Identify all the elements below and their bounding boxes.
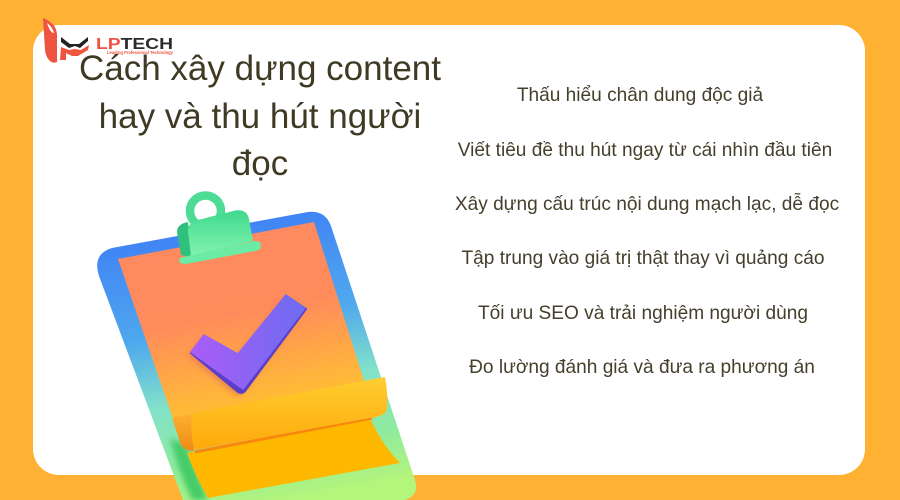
paper [118,222,364,445]
clip ring [190,196,221,226]
title [79,49,441,183]
logo: LPTECH [43,18,174,63]
title: Cách xây dựng content [79,49,441,88]
fold cast shadow [195,418,372,452]
check mark [188,299,303,396]
paper bottom [187,418,400,498]
list item 3: Xây dựng cấu trúc nội dung mạch lạc, dễ đọc [455,194,839,215]
logo: LPTECH: Leading Professional Technology [107,50,174,55]
clip bar [179,241,261,264]
board [97,212,416,500]
list item 2: Viết tiêu đề thu hút ngay từ cái nhìn đầu tiên [458,140,832,161]
board shadow [170,438,208,500]
list item 4: Tập trung vào giá trị thật thay vì quảng cáo [461,248,824,269]
list item 5: Tối ưu SEO và trải nghiệm người dùng [478,303,808,324]
list item 6: Đo lường đánh giá và đưa ra phương án [469,357,815,378]
logo: LPTECH: LP TECH [96,36,173,53]
fold curl shadow [172,414,194,451]
paper fold [191,377,387,450]
clip body [188,210,253,256]
title: hay và thu hút người [99,96,421,136]
title: đọc [232,144,288,183]
clip back [177,222,192,258]
list item 1: Thấu hiểu chân dung độc giả [517,85,763,106]
